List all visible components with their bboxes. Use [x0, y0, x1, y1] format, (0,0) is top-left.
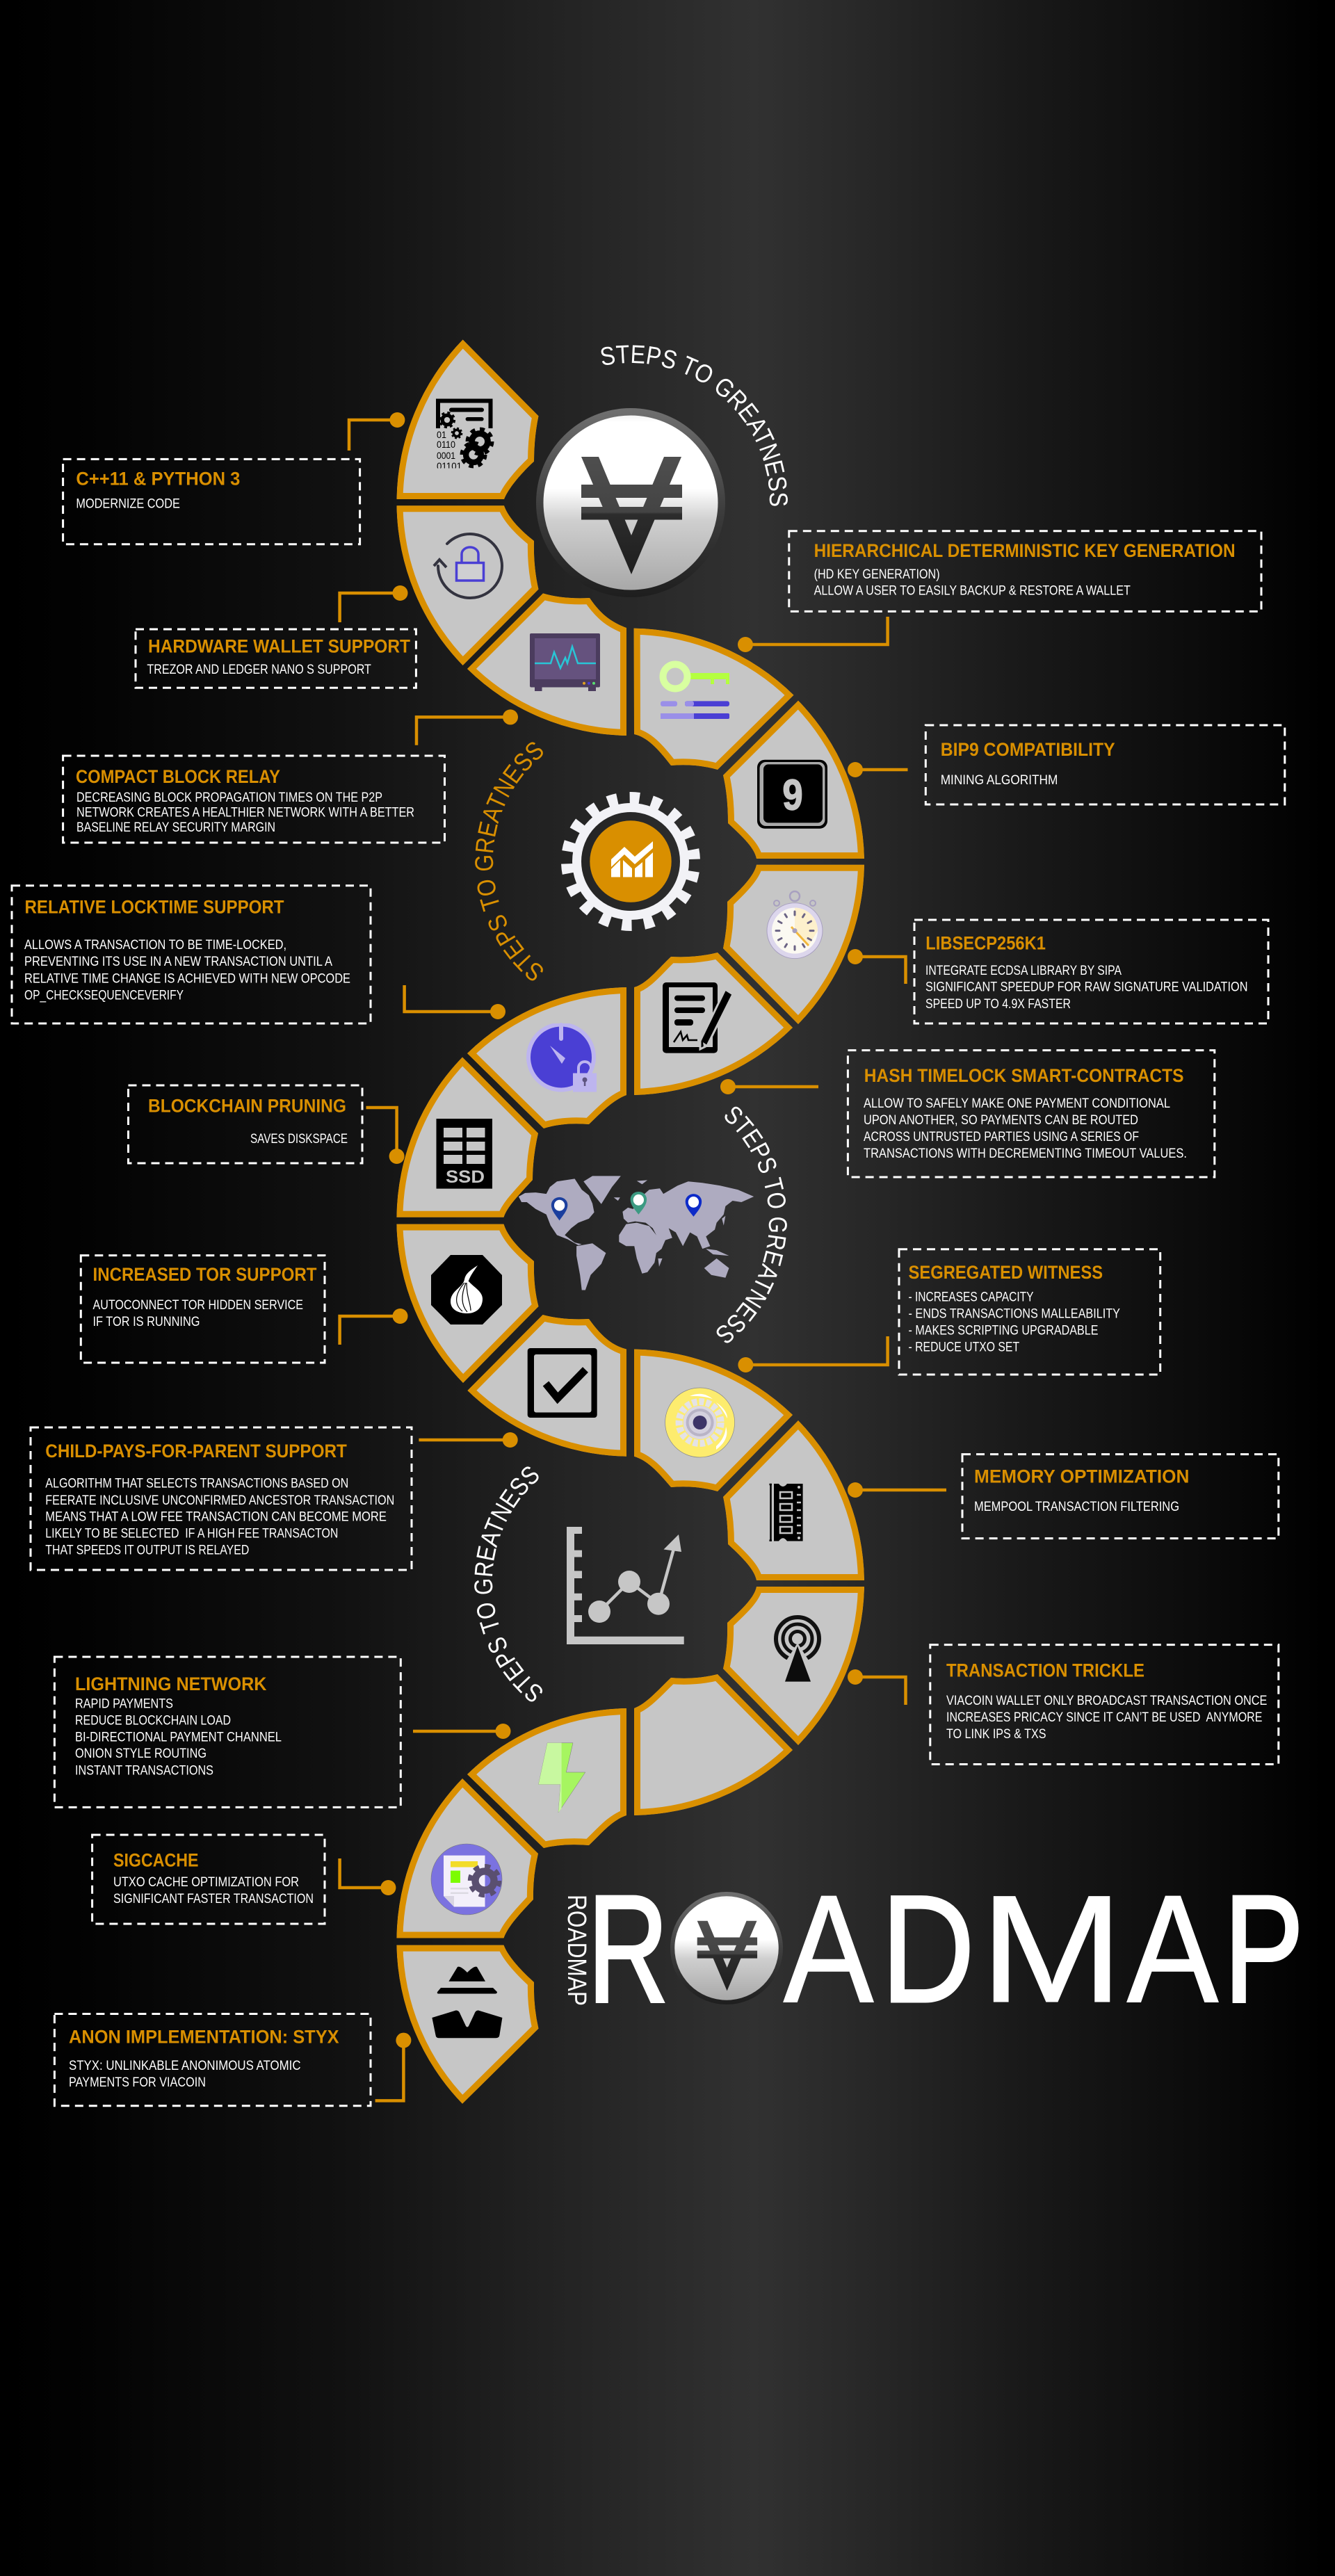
- callout: memory optimization: [962, 1455, 1279, 1539]
- callout: relative locktime support: RELATIVE TIME CHANGE IS ACHIEVED WITH NEW OPCODE: [24, 972, 350, 986]
- icon: broadcast antenna: [776, 1617, 819, 1682]
- title: roadmap wordmark: D: [881, 1864, 975, 2034]
- segment: hardware wallet: [396, 505, 538, 665]
- heading: steps to greatness arc 4: STEPS TO GREATNESS: [474, 1466, 542, 1702]
- icon: key and progress bars: [661, 665, 729, 719]
- callout: hash timelock smart-contracts: ALLOW TO SAFELY MAKE ONE PAYMENT CONDITIONAL: [864, 1096, 1170, 1111]
- segment: memory optimization: [723, 1420, 864, 1580]
- callout: transaction trickle: TRANSACTION TRICKLE: [946, 1660, 1144, 1681]
- connector: child pays for parent: [419, 1432, 518, 1448]
- callout: segregated witness: [899, 1249, 1160, 1375]
- callout: sigcache: [92, 1835, 325, 1924]
- icon: code document with gears: 0110: [437, 439, 455, 450]
- connector: C++11: [349, 412, 405, 451]
- heading: steps to greatness arc 2: STEPS TO GREATNESS: [475, 742, 543, 980]
- title: roadmap wordmark: [588, 1863, 1304, 2034]
- connector: HD keys: [738, 617, 888, 652]
- callout: libsecp256k1: SIGNIFICANT SPEEDUP FOR RAW SIGNATURE VALIDATION: [925, 980, 1247, 995]
- callout: relative locktime support: RELATIVE LOCKTIME SUPPORT: [25, 897, 284, 918]
- callout: increased tor support: INCREASED TOR SUPPORT: [93, 1264, 317, 1285]
- callout: lightning network: REDUCE BLOCKCHAIN LOAD: [75, 1713, 231, 1728]
- segment: lightning network: [467, 1708, 626, 1848]
- icon: lightning bolt: [538, 1743, 585, 1813]
- segment: tor support: [396, 1224, 538, 1383]
- icon: clock with padlock: [526, 1022, 597, 1092]
- segment: blank step: [634, 1674, 793, 1815]
- callout: child pays for parent support: CHILD-PAYS-FOR-PARENT SUPPORT: [45, 1441, 347, 1461]
- callout: anon implementation styx: [54, 2014, 371, 2106]
- callout: lightning network: BI-DIRECTIONAL PAYMENT CHANNEL: [75, 1730, 282, 1744]
- callout: segregated witness: - MAKES SCRIPTING UPGRADABLE: [908, 1324, 1099, 1338]
- callout: hash timelock smart-contracts: TRANSACTIONS WITH DECREMENTING TIMEOUT VALUES.: [864, 1147, 1187, 1161]
- segment: BIP9: [723, 701, 864, 859]
- connector: anon styx: [375, 2033, 411, 2100]
- callout: child pays for parent support: [31, 1427, 412, 1570]
- callout: lightning network: ONION STYLE ROUTING: [75, 1747, 207, 1761]
- callout: lightning network: INSTANT TRANSACTIONS: [75, 1764, 213, 1779]
- heading: steps to greatness arc 3: STEPS TO GREATNESS: [716, 1107, 787, 1343]
- callout: child pays for parent support: FEERATE INCLUSIVE UNCONFIRMED ANCESTOR TRANSACTION: [45, 1493, 394, 1508]
- callout: transaction trickle: TO LINK IPS & TXS: [946, 1727, 1046, 1742]
- icon: code document with gears: [437, 400, 492, 471]
- callout: compact block relay: COMPACT BLOCK RELAY: [76, 766, 280, 787]
- icon: network monitor: [530, 633, 600, 691]
- icon: lock with circular arrow: [434, 534, 502, 598]
- connector: hash timelock: [720, 1079, 818, 1094]
- icon: key cap 9: 9: [782, 772, 803, 820]
- callout: sigcache: SIGNIFICANT FASTER TRANSACTION: [113, 1892, 314, 1906]
- connector: blockchain pruning: [366, 1108, 405, 1164]
- title: roadmap wordmark: P: [1224, 1863, 1304, 2034]
- callout: lightning network: [54, 1657, 400, 1807]
- connector: lightning network: [413, 1724, 510, 1739]
- icon: anonymous spy: [432, 1967, 502, 2038]
- callout: sigcache: UTXO CACHE OPTIMIZATION FOR: [113, 1875, 299, 1890]
- callout: anon implementation styx: STYX: UNLINKABLE ANONIMOUS ATOMIC: [69, 2059, 300, 2073]
- segment: compact block relay: [467, 593, 626, 736]
- callout: hardware wallet support: HARDWARE WALLET SUPPORT: [148, 636, 410, 657]
- callout: segregated witness: SEGREGATED WITNESS: [908, 1262, 1103, 1283]
- callout: child pays for parent support: LIKELY TO BE SELECTED IF A HIGH FEE TRANSACTON: [45, 1527, 338, 1541]
- segment: child pays for parent: [467, 1315, 626, 1457]
- title: roadmap wordmark: A: [1127, 1864, 1218, 2034]
- callout: increased tor support: IF TOR IS RUNNING: [93, 1315, 200, 1329]
- callout: libsecp256k1: [914, 920, 1268, 1023]
- callout: C++11 and Python 3: [63, 459, 360, 544]
- segment: libsecp256k1: [723, 865, 864, 1024]
- callout: hash timelock smart-contracts: ACROSS UNTRUSTED PARTIES USING A SERIES OF: [864, 1130, 1139, 1144]
- callout: blockchain pruning: [128, 1085, 362, 1163]
- callout: C++11 and Python 3: MODERNIZE CODE: [76, 496, 180, 512]
- callout: blockchain pruning: BLOCKCHAIN PRUNING: [148, 1096, 346, 1117]
- callout: child pays for parent support: THAT SPEEDS IT OUTPUT IS RELAYED: [45, 1543, 249, 1557]
- callout: segregated witness: - REDUCE UTXO SET: [908, 1340, 1019, 1355]
- callout: lightning network: RAPID PAYMENTS: [75, 1697, 173, 1712]
- callout: hierarchical deterministic key generation: HIERARCHICAL DETERMINISTIC KEY GENERATION: [814, 540, 1236, 561]
- segment: hierarchical deterministic keys: [634, 629, 794, 770]
- callout: libsecp256k1: INTEGRATE ECDSA LIBRARY BY SIPA: [925, 964, 1122, 978]
- segment: relative locktime: [467, 987, 626, 1128]
- callout: hardware wallet support: [136, 629, 416, 688]
- icon: key cap 9: [757, 760, 827, 829]
- callout: hierarchical deterministic key generation: ALLOW A USER TO EASILY BACKUP & RESTORE A WALLET: [814, 584, 1131, 599]
- callout: lightning network: LIGHTNING NETWORK: [75, 1674, 267, 1694]
- callout: compact block relay: NETWORK CREATES A HEALTHIER NETWORK WITH A BETTER: [76, 805, 414, 820]
- callout: hierarchical deterministic key generation: (HD KEY GENERATION): [814, 567, 940, 582]
- callout: transaction trickle: VIACOIN WALLET ONLY BROADCAST TRANSACTION ONCE: [946, 1694, 1267, 1708]
- connector: segregated witness: [738, 1336, 888, 1372]
- callout: relative locktime support: [12, 886, 371, 1023]
- connector: BIP9: [848, 762, 908, 777]
- connector: relative locktime: [405, 985, 505, 1019]
- callout: relative locktime support: ALLOWS A TRANSACTION TO BE TIME-LOCKED,: [24, 938, 286, 953]
- icon: disc: [665, 1388, 735, 1457]
- callout: segregated witness: - ENDS TRANSACTIONS MALLEABILITY: [908, 1307, 1120, 1322]
- callout: BIP9 compatibility: BIP9 COMPATIBILITY: [941, 739, 1115, 760]
- callout: BIP9 compatibility: MINING ALGORITHM: [941, 773, 1058, 788]
- title: roadmap wordmark: M: [980, 1863, 1124, 2034]
- heading: vertical roadmap label: ROADMAP: [562, 1895, 591, 2006]
- callout: blockchain pruning: SAVES DISKSPACE: [250, 1132, 348, 1147]
- callout: increased tor support: [81, 1256, 325, 1363]
- icon: document with gear: [431, 1844, 502, 1915]
- connector: sigcache: [340, 1858, 396, 1895]
- connector: compact block relay: [416, 709, 518, 745]
- callout: transaction trickle: [930, 1645, 1279, 1765]
- callout: segregated witness: - INCREASES CAPACITY: [908, 1290, 1034, 1305]
- callout: increased tor support: AUTOCONNECT TOR HIDDEN SERVICE: [93, 1298, 303, 1313]
- callout: compact block relay: [63, 756, 445, 843]
- connector: hardware wallet: [340, 585, 407, 622]
- segment: segregated witness: [634, 1349, 793, 1491]
- callout: libsecp256k1: SPEED UP TO 4.9X FASTER: [925, 997, 1071, 1012]
- connector: tor support: [340, 1309, 407, 1345]
- icon: central gear with chart: [558, 789, 703, 934]
- callout: hash timelock smart-contracts: UPON ANOTHER, SO PAYMENTS CAN BE ROUTED: [864, 1113, 1138, 1128]
- callout: hash timelock smart-contracts: [848, 1051, 1215, 1177]
- segment: modernize code: [396, 339, 538, 499]
- title: roadmap wordmark: A: [784, 1863, 873, 2034]
- icon: code document with gears: 0001: [437, 450, 455, 461]
- icon: SSD: SSD: [446, 1167, 485, 1187]
- segment: sigcache: [396, 1779, 538, 1938]
- icon: stopwatch: [767, 891, 823, 959]
- logo: top viacoin coin: [536, 408, 725, 597]
- callout: memory optimization: MEMPOOL TRANSACTION FILTERING: [974, 1500, 1179, 1514]
- callout: hierarchical deterministic key generation: [789, 531, 1261, 611]
- callout: sigcache: SIGCACHE: [113, 1849, 199, 1870]
- callout: compact block relay: DECREASING BLOCK PROPAGATION TIMES ON THE P2P: [76, 791, 382, 805]
- chart: line chart icon: [567, 1527, 684, 1644]
- heading: steps to greatness arc 1: STEPS TO GREATNESS: [601, 345, 788, 506]
- callout: BIP9 compatibility: [925, 725, 1285, 804]
- icon: tor onion: [431, 1255, 502, 1325]
- connector: memory optimization: [848, 1482, 946, 1498]
- callout: child pays for parent support: ALGORITHM THAT SELECTS TRANSACTIONS BASED ON: [45, 1476, 348, 1491]
- callout: relative locktime support: PREVENTING ITS USE IN A NEW TRANSACTION UNTIL A: [24, 955, 332, 969]
- icon: RAM module: [769, 1484, 803, 1541]
- callout: relative locktime support: OP_CHECKSEQUENCEVERIFY: [24, 989, 184, 1003]
- callout: memory optimization: MEMORY OPTIMIZATION: [974, 1466, 1189, 1487]
- segment: transaction trickle: [723, 1587, 864, 1745]
- icon: code document with gears: 01: [437, 429, 446, 440]
- callout: child pays for parent support: MEANS THAT A LOW FEE TRANSACTION CAN BECOME MORE: [45, 1510, 387, 1525]
- logo: coin as letter O: [670, 1892, 783, 2004]
- connector: transaction trickle: [848, 1669, 905, 1705]
- icon: SSD: [437, 1119, 492, 1189]
- callout: hash timelock smart-contracts: HASH TIMELOCK SMART-CONTRACTS: [864, 1065, 1183, 1086]
- chart: world map with pins: [519, 1176, 754, 1290]
- segment: hash timelock contracts: [634, 953, 793, 1095]
- title: roadmap wordmark: R: [588, 1863, 668, 2034]
- icon: code document with gears: 01101: [437, 460, 462, 471]
- callout: C++11 and Python 3: C++11 & PYTHON 3: [76, 468, 240, 489]
- icon: signed contract: [663, 982, 733, 1053]
- connector: libsecp256k1: [848, 949, 905, 984]
- callout: libsecp256k1: LIBSECP256K1: [925, 933, 1046, 954]
- callout: compact block relay: BASELINE RELAY SECURITY MARGIN: [76, 820, 275, 835]
- icon: checkbox: [528, 1348, 597, 1418]
- segment: anon styx: [396, 1945, 538, 2104]
- callout: anon implementation styx: PAYMENTS FOR VIACOIN: [69, 2075, 206, 2090]
- callout: hardware wallet support: TREZOR AND LEDGER NANO S SUPPORT: [147, 663, 371, 677]
- callout: anon implementation styx: ANON IMPLEMENTATION: STYX: [69, 2027, 339, 2048]
- callout: transaction trickle: INCREASES PRICACY SINCE IT CAN’T BE USED ANYMORE: [946, 1710, 1262, 1725]
- segment: blockchain pruning: [396, 1057, 538, 1217]
